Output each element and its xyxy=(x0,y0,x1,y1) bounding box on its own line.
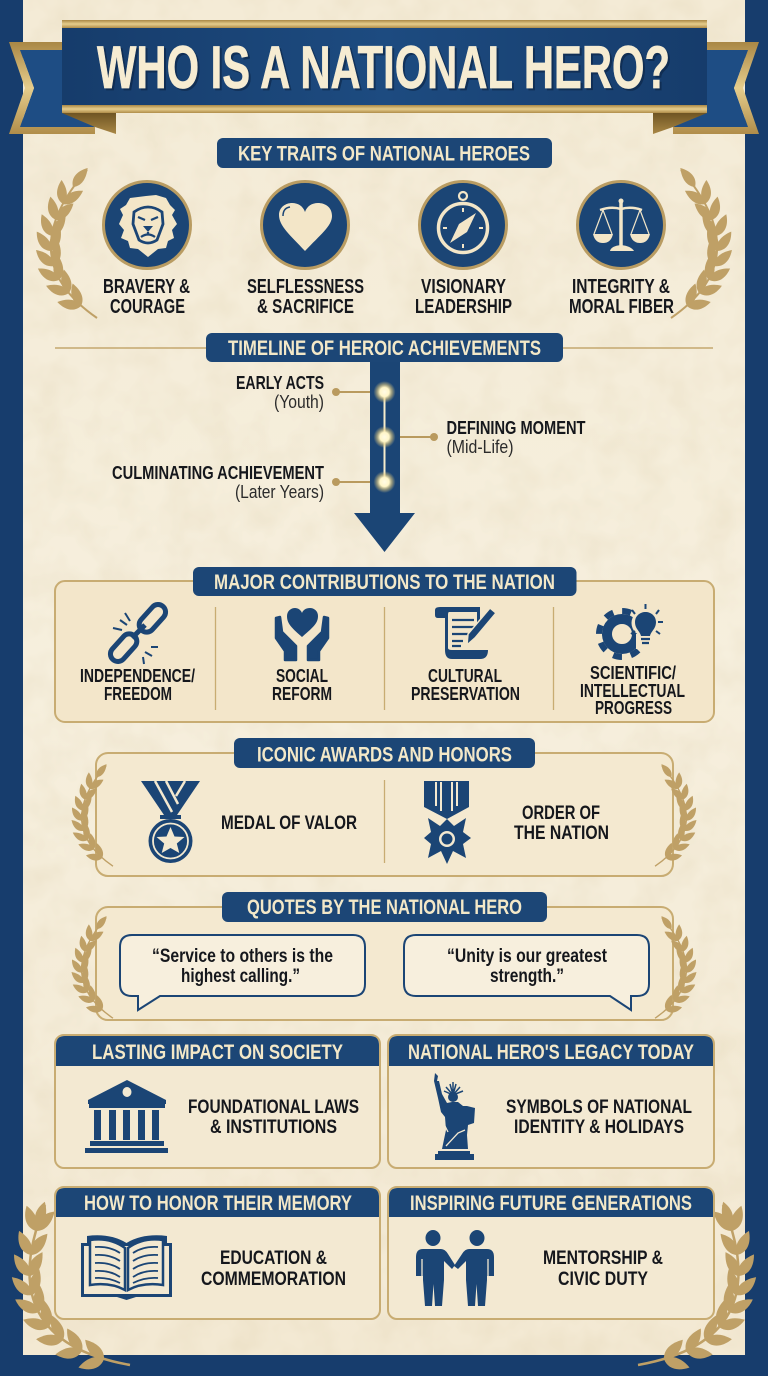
label: scientific progress xyxy=(580,662,685,718)
icon: scroll and quill xyxy=(435,607,496,659)
trait: visionary xyxy=(415,182,512,318)
card header: INSPIRING FUTURE GENERATIONS xyxy=(410,1192,692,1215)
label: social reform xyxy=(272,665,332,704)
trait: bravery xyxy=(103,182,190,318)
panel: major contributions xyxy=(55,567,714,722)
laurel: key traits right xyxy=(671,165,735,318)
label: BRAVERY & xyxy=(103,276,190,298)
laurel: quotes right xyxy=(655,914,699,1018)
card header xyxy=(56,1188,379,1217)
label: foundational laws: & INSTITUTIONS xyxy=(210,1117,337,1138)
label: symbols: SYMBOLS OF NATIONAL xyxy=(506,1097,692,1118)
quote bubble: unity xyxy=(404,935,649,1010)
milestone: culminating achievement xyxy=(112,462,325,502)
trait: integrity xyxy=(569,182,674,318)
label xyxy=(247,276,364,318)
laurel: awards left xyxy=(69,762,113,866)
card header: HOW TO HONOR THEIR MEMORY xyxy=(84,1192,352,1215)
label: education xyxy=(201,1248,346,1290)
heading: quotes xyxy=(222,892,547,922)
right ribbon tail xyxy=(653,42,759,134)
label: order of the nation: THE NATION xyxy=(514,823,609,844)
quote bubble: unity: strength.” xyxy=(490,966,564,987)
label: SELFLESSNESS xyxy=(247,276,364,298)
quote bubble: service: highest calling.” xyxy=(181,966,300,987)
heading: awards xyxy=(234,738,535,768)
icon: heart xyxy=(262,182,348,268)
quote bubble: service: “Service to others is the xyxy=(152,946,333,967)
card: legacy today xyxy=(388,1035,714,1168)
panel: quotes xyxy=(69,892,699,1020)
icon: statue xyxy=(434,1073,475,1160)
quote bubble: unity: “Unity is our greatest xyxy=(447,946,608,967)
heading: timeline: TIMELINE OF HEROIC ACHIEVEMENTS xyxy=(228,337,541,360)
card header xyxy=(389,1036,713,1066)
milestone: early acts: EARLY ACTS xyxy=(236,372,324,393)
card: honor memory xyxy=(55,1187,380,1319)
label: cultural preservation: PRESERVATION xyxy=(411,683,520,704)
card header xyxy=(389,1188,713,1217)
icon: medal of valor xyxy=(141,781,200,863)
label: scientific progress: INTELLECTUAL xyxy=(580,680,685,701)
laurel: quotes left xyxy=(69,914,113,1018)
heading: timeline xyxy=(206,333,563,362)
card: lasting impact xyxy=(55,1035,380,1168)
milestone: culminating achievement: (Later Years) xyxy=(235,482,324,502)
milestone: defining moment: (Mid-Life) xyxy=(446,437,514,457)
laurel: bottom right xyxy=(638,1200,760,1373)
label: scientific progress: SCIENTIFIC/ xyxy=(590,662,676,683)
heading: contributions xyxy=(193,567,576,596)
banner body xyxy=(62,20,707,113)
label: independence xyxy=(80,665,195,704)
icon: order of the nation xyxy=(424,781,471,864)
label: mentorship: CIVIC DUTY xyxy=(558,1269,648,1290)
laurel: awards right xyxy=(655,762,699,866)
label: education: COMMEMORATION xyxy=(201,1269,346,1290)
label: cultural preservation xyxy=(411,665,520,704)
icon: broken chain xyxy=(107,601,169,665)
label: COURAGE xyxy=(110,296,185,318)
label: independence: INDEPENDENCE/ xyxy=(80,665,195,686)
label: medal of valor: MEDAL OF VALOR xyxy=(221,813,357,834)
card: future generations xyxy=(388,1187,714,1319)
icon: hands and heart xyxy=(276,608,328,660)
label: order of the nation xyxy=(514,803,609,844)
heading: contributions: MAJOR CONTRIBUTIONS TO THE NATION xyxy=(214,571,555,594)
icon: classical building xyxy=(85,1080,168,1153)
card header xyxy=(56,1036,379,1066)
label: LEADERSHIP xyxy=(415,296,512,318)
card header: LASTING IMPACT ON SOCIETY xyxy=(92,1041,343,1064)
heading: key traits xyxy=(217,138,552,168)
heading: awards: ICONIC AWARDS AND HONORS xyxy=(257,744,512,766)
label: MORAL FIBER xyxy=(569,296,674,318)
label: cultural preservation: CULTURAL xyxy=(428,665,502,686)
label: mentorship xyxy=(543,1248,663,1290)
icon: open book xyxy=(81,1235,172,1300)
label: social reform: REFORM xyxy=(272,683,332,704)
icon: gear and light bulb xyxy=(599,604,663,657)
timeline xyxy=(112,333,586,552)
laurel: key traits left xyxy=(33,165,97,318)
heading: key traits: KEY TRAITS OF NATIONAL HEROES xyxy=(238,142,530,166)
label: symbols: IDENTITY & HOLIDAYS xyxy=(514,1117,684,1138)
icon: scales xyxy=(578,182,664,268)
label: education: EDUCATION & xyxy=(220,1248,327,1269)
label: independence: FREEDOM xyxy=(104,683,172,704)
arrow xyxy=(354,360,415,552)
label: & SACRIFICE xyxy=(257,296,354,318)
label: VISIONARY xyxy=(421,276,507,298)
label: order of the nation: ORDER OF xyxy=(522,803,600,824)
icon: lion xyxy=(104,182,190,268)
milestone: early acts: (Youth) xyxy=(274,392,324,412)
label: mentorship: MENTORSHIP & xyxy=(543,1248,663,1269)
label xyxy=(415,276,512,318)
label: foundational laws: FOUNDATIONAL LAWS xyxy=(188,1097,359,1118)
label: foundational laws xyxy=(188,1097,359,1138)
quote bubble: service xyxy=(120,935,365,1010)
laurel: bottom left xyxy=(8,1200,130,1373)
label: symbols xyxy=(506,1097,692,1138)
label: scientific progress: PROGRESS xyxy=(595,697,672,718)
label: social reform: SOCIAL xyxy=(276,665,328,686)
card header: NATIONAL HERO'S LEGACY TODAY xyxy=(408,1041,694,1064)
trait: selflessness xyxy=(247,182,364,318)
milestone: early acts xyxy=(236,372,324,412)
milestone: defining moment: DEFINING MOMENT xyxy=(446,417,586,438)
panel: awards xyxy=(69,738,699,876)
left ribbon tail xyxy=(9,42,116,134)
milestone: culminating achievement: CULMINATING ACHIEVEMENT xyxy=(112,462,325,483)
label xyxy=(103,276,190,318)
icon: compass xyxy=(420,182,506,268)
connectors and glowing nodes xyxy=(332,381,438,493)
label xyxy=(569,276,674,318)
label: INTEGRITY & xyxy=(572,276,670,298)
icon: two people shaking hands xyxy=(416,1230,494,1306)
milestone: defining moment xyxy=(446,417,586,457)
title banner xyxy=(9,20,759,134)
heading: quotes: QUOTES BY THE NATIONAL HERO xyxy=(247,896,522,919)
